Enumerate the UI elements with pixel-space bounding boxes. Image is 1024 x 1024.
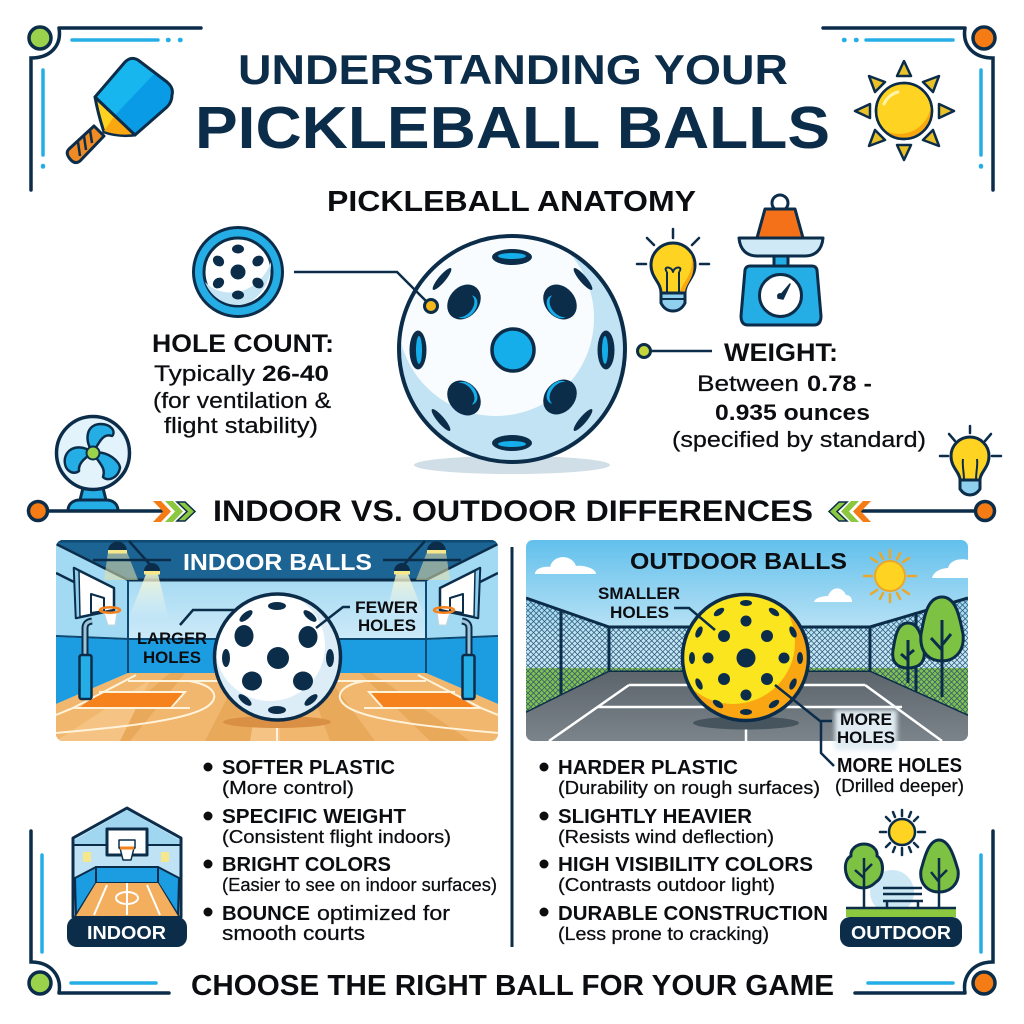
corner frame: bottom left xyxy=(29,831,169,994)
list: outdoor ball features: (Resists wind deflection) xyxy=(558,827,774,847)
icon: weighing scale xyxy=(739,195,823,325)
list: outdoor ball features: (Contrasts outdoor light) xyxy=(558,875,775,895)
panel: indoor balls scene xyxy=(56,540,498,741)
text: more holes drilled deeper xyxy=(835,755,964,796)
list: indoor ball features: (More control) xyxy=(222,778,354,798)
main pickleball diagram xyxy=(398,220,625,474)
corner frame: top left xyxy=(29,27,201,190)
section heading: pickleball anatomy: PICKLEBALL ANATOMY xyxy=(327,186,696,218)
leader: hole count to ball xyxy=(294,272,438,312)
callout: weight xyxy=(672,339,926,452)
list: outdoor ball features xyxy=(540,757,828,944)
label: more holes: HOLES xyxy=(837,728,895,747)
list: outdoor ball features: HARDER PLASTIC xyxy=(558,757,738,779)
list: indoor ball features: optimized for xyxy=(317,902,450,925)
list: indoor ball features: SOFTER PLASTIC xyxy=(222,757,395,779)
list: indoor ball features: (Easier to see on indoor surfaces) xyxy=(222,875,497,895)
callout: hole count: flight stability) xyxy=(164,413,318,438)
list: indoor ball features xyxy=(204,757,497,945)
list: indoor ball features: smooth courts xyxy=(222,922,365,945)
list: outdoor ball features: HIGH VISIBILITY COLORS xyxy=(558,854,813,876)
label: fewer holes xyxy=(316,598,418,635)
divider bar left with chevrons xyxy=(28,501,195,522)
fence and grass xyxy=(526,668,968,716)
label: smaller holes: HOLES xyxy=(610,603,669,622)
list: outdoor ball features: SLIGHTLY HEAVIER xyxy=(558,806,753,828)
yellow outdoor ball with holes xyxy=(680,592,810,722)
label: larger holes: HOLES xyxy=(143,648,201,667)
basketball hoop right xyxy=(434,568,480,699)
callout: hole count xyxy=(152,330,334,438)
title xyxy=(195,46,830,161)
court surface xyxy=(526,672,968,741)
title line 2: PICKLEBALL BALLS xyxy=(195,95,830,161)
callout: weight: WEIGHT: xyxy=(724,339,838,367)
section heading: indoor vs outdoor: INDOOR VS. OUTDOOR DIFFERENCES xyxy=(213,495,813,528)
icon: light bulb upper xyxy=(637,229,709,311)
callout: weight: 0.78 - xyxy=(807,371,872,396)
icon: indoor gym badge: INDOOR xyxy=(87,922,166,943)
icon: pickleball paddle xyxy=(67,58,172,163)
list: outdoor ball features: DURABLE CONSTRUCTION xyxy=(558,903,828,925)
corner frame: top right xyxy=(823,27,995,190)
icon: outdoor park badge: OUTDOOR xyxy=(851,922,951,943)
list: indoor ball features: (Consistent flight indoors) xyxy=(222,827,451,847)
title line 1: UNDERSTANDING YOUR xyxy=(238,46,788,93)
callout: hole count: 26-40 xyxy=(262,361,329,386)
label: fewer holes: FEWER xyxy=(355,598,418,617)
divider bar right with chevrons xyxy=(829,501,994,522)
callout: weight: Between xyxy=(697,371,799,396)
label: larger holes xyxy=(137,610,235,667)
icon: hole count ball xyxy=(194,228,282,316)
sun small xyxy=(864,550,916,602)
panel title: outdoor balls: OUTDOOR BALLS xyxy=(630,548,847,574)
panel: outdoor balls scene xyxy=(526,540,968,766)
callout: hole count: HOLE COUNT: xyxy=(152,330,334,358)
panel title: indoor balls: INDOOR BALLS xyxy=(183,549,372,575)
basketball hoop left xyxy=(74,568,120,699)
corner frame: bottom right xyxy=(855,831,995,994)
icon: outdoor park badge xyxy=(840,810,962,947)
white indoor ball with holes xyxy=(214,591,340,720)
leader: weight to ball xyxy=(638,344,712,358)
label: smaller holes: SMALLER xyxy=(598,584,680,603)
ceiling lights xyxy=(104,542,450,620)
callout: hole count: (for ventilation & xyxy=(153,388,331,413)
list: indoor ball features: BRIGHT COLORS xyxy=(222,854,391,876)
list: indoor ball features: BOUNCE xyxy=(222,902,310,925)
callout: hole count: Typically xyxy=(154,361,256,386)
wood floor xyxy=(56,673,498,741)
trees xyxy=(893,597,963,697)
text: more holes drilled deeper: MORE HOLES xyxy=(837,755,962,777)
label: smaller holes xyxy=(598,584,715,630)
label: more holes: MORE xyxy=(840,710,892,729)
callout: weight: 0.935 ounces xyxy=(715,400,870,425)
list: indoor ball features: SPECIFIC WEIGHT xyxy=(222,806,406,828)
callout: weight: (specified by standard) xyxy=(672,427,926,452)
icon: sun xyxy=(855,61,954,160)
icon: fan xyxy=(56,416,130,511)
label: larger holes: LARGER xyxy=(137,629,207,648)
closing tagline: CHOOSE THE RIGHT BALL FOR YOUR GAME xyxy=(191,970,834,1002)
icon: light bulb lower xyxy=(940,426,1001,495)
clouds xyxy=(535,557,968,602)
label: more holes xyxy=(775,685,897,766)
label: fewer holes: HOLES xyxy=(358,616,416,635)
text: more holes drilled deeper: (Drilled deeper) xyxy=(835,776,964,796)
list: outdoor ball features: (Durability on rough surfaces) xyxy=(558,778,820,798)
list: outdoor ball features: (Less prone to cracking) xyxy=(558,924,769,944)
icon: indoor gym badge xyxy=(67,808,187,947)
